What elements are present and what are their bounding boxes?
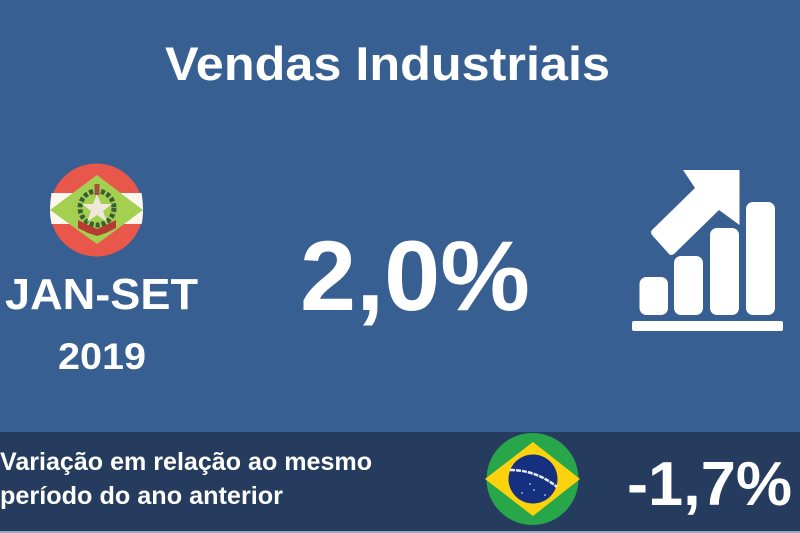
- national value: -1,7%: [627, 450, 792, 519]
- period label: JAN-SET: [5, 270, 198, 319]
- comparison description: período do ano anterior: [0, 482, 283, 510]
- icon: rising bar chart with arrow: [632, 170, 783, 331]
- icon: Santa Catarina flag: [50, 164, 143, 256]
- year label: 2019: [58, 336, 146, 377]
- title: Vendas Industriais: [165, 37, 610, 90]
- comparison description: [0, 448, 372, 510]
- icon: Brazil flag: [485, 433, 580, 525]
- comparison description: Variação em relação ao mesmo: [0, 448, 372, 476]
- panel: national comparison band: [0, 432, 800, 533]
- main value: 2,0%: [300, 220, 530, 331]
